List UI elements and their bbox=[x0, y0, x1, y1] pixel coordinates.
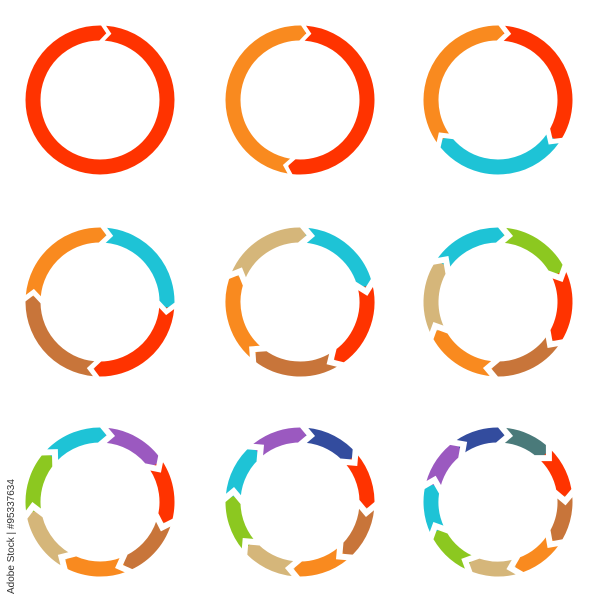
ring 3: three segments bbox=[405, 7, 591, 193]
watermark text: Adobe Stock | #95337634 bbox=[6, 479, 17, 594]
ring 7: seven segments bbox=[5, 407, 195, 597]
ring 6: six segments bbox=[405, 209, 591, 395]
ring 2: two segments bbox=[222, 22, 378, 178]
ring 1: single segment bbox=[33, 23, 167, 167]
ring 9: nine segments bbox=[403, 407, 593, 597]
ring 8: eight segments bbox=[206, 408, 394, 596]
ring 4: four segments bbox=[23, 225, 177, 379]
ring 5: five segments bbox=[205, 207, 395, 397]
